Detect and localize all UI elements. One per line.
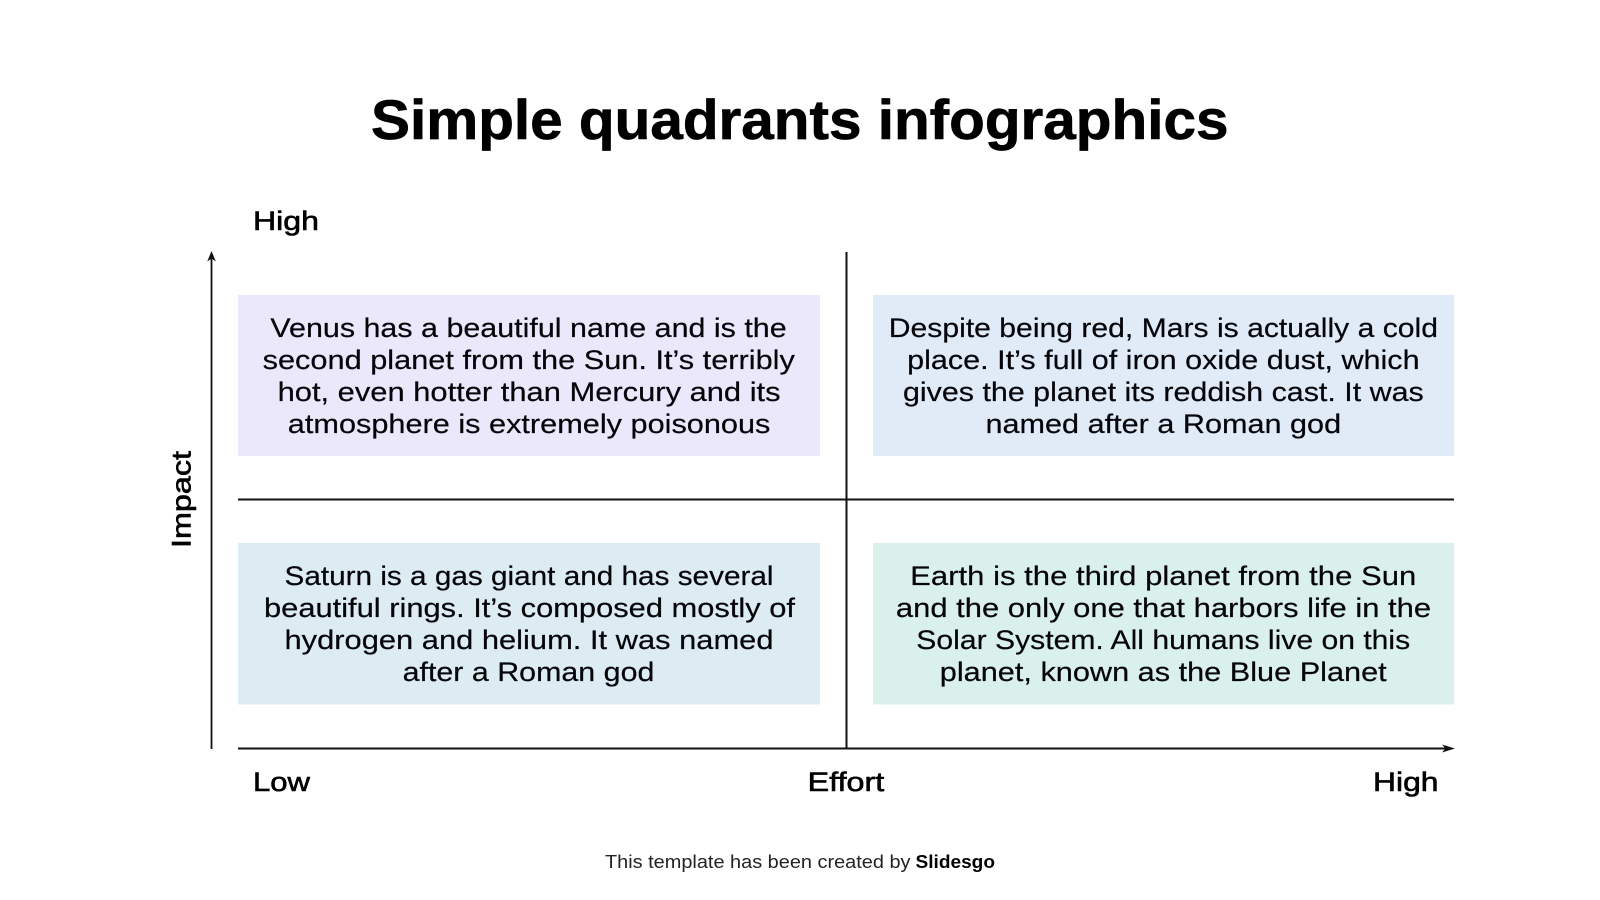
y axis title: Impact: Impact [166,450,196,548]
panel: Mars quadrant: named after a Roman god [986,409,1341,439]
panel: Venus quadrant: Venus has a beautiful name and is the [270,313,787,343]
panel: Venus quadrant: second planet from the Sun. It’s terribly [263,345,796,375]
panel: Saturn quadrant: beautiful rings. It’s composed mostly of [264,593,796,623]
horizontal quadrant divider [238,498,1454,500]
panel: Earth quadrant: and the only one that harbors life in the [896,593,1431,623]
footer credit: This template has been created by [605,851,911,872]
panel: Saturn quadrant: after a Roman god [403,657,654,687]
x axis label: High: High [1373,767,1438,797]
vertical quadrant divider [846,252,848,749]
panel: Venus quadrant: atmosphere is extremely poisonous [288,409,770,439]
panel: Saturn quadrant: Saturn is a gas giant and has several [284,561,774,591]
x axis title: Effort: Effort [808,767,885,797]
panel: Venus quadrant: hot, even hotter than Mercury and its [278,377,781,407]
y axis label: High: High [253,206,319,236]
arrow: effort axis [238,744,1455,752]
title: Simple quadrants infographics [371,89,1228,151]
panel: Mars quadrant: Despite being red, Mars is actually a cold [889,313,1438,343]
arrow: impact axis [207,251,216,749]
footer credit: Slidesgo [916,851,995,872]
panel: Mars quadrant: place. It’s full of iron oxide dust, which [907,345,1420,375]
panel: Mars quadrant: gives the planet its reddish cast. It was [903,377,1424,407]
panel: Saturn quadrant [238,543,820,704]
panel: Saturn quadrant: hydrogen and helium. It was named [284,625,774,655]
panel: Earth quadrant [873,543,1454,704]
panel: Venus quadrant [238,295,820,456]
panel: Mars quadrant [873,295,1454,456]
panel: Earth quadrant: planet, known as the Blue Planet [940,657,1387,687]
panel: Earth quadrant: Solar System. All humans live on this [916,625,1410,655]
panel: Earth quadrant: Earth is the third planet from the Sun [910,561,1416,591]
x axis label: Low: Low [253,767,311,797]
